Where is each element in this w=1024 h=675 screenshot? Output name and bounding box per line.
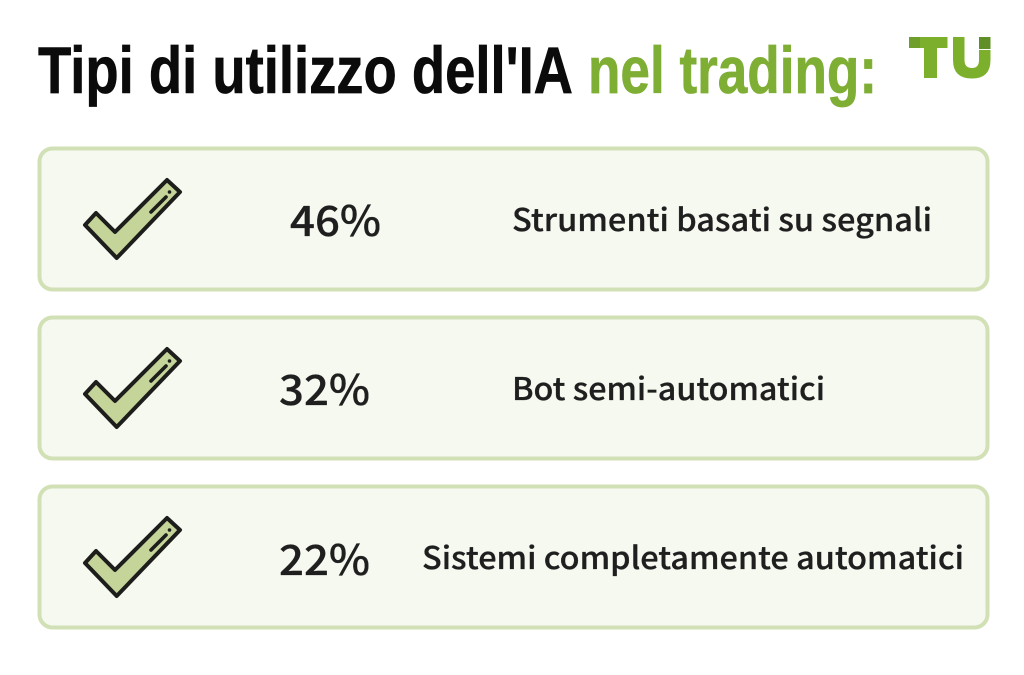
title: nel trading:: [588, 33, 877, 107]
title: Tipi di utilizzo dell'IA: [38, 33, 573, 107]
label: Strumenti basati su segnali: [512, 195, 932, 240]
percentage 46%: 46%: [290, 188, 381, 249]
icon: check mark: [85, 180, 180, 258]
logo: TU: [909, 37, 990, 78]
panel: semi-automatici: [40, 318, 988, 458]
icon: check mark: [85, 349, 180, 427]
icon: check mark: [85, 518, 180, 596]
label: Sistemi completamente automatici: [422, 533, 964, 578]
percentage 22%: 22%: [279, 527, 370, 588]
label: Bot semi-automatici: [512, 364, 825, 409]
percentage 32%: 32%: [279, 357, 370, 418]
panel: segnali: [40, 148, 988, 290]
panel: automatici: [40, 486, 988, 628]
